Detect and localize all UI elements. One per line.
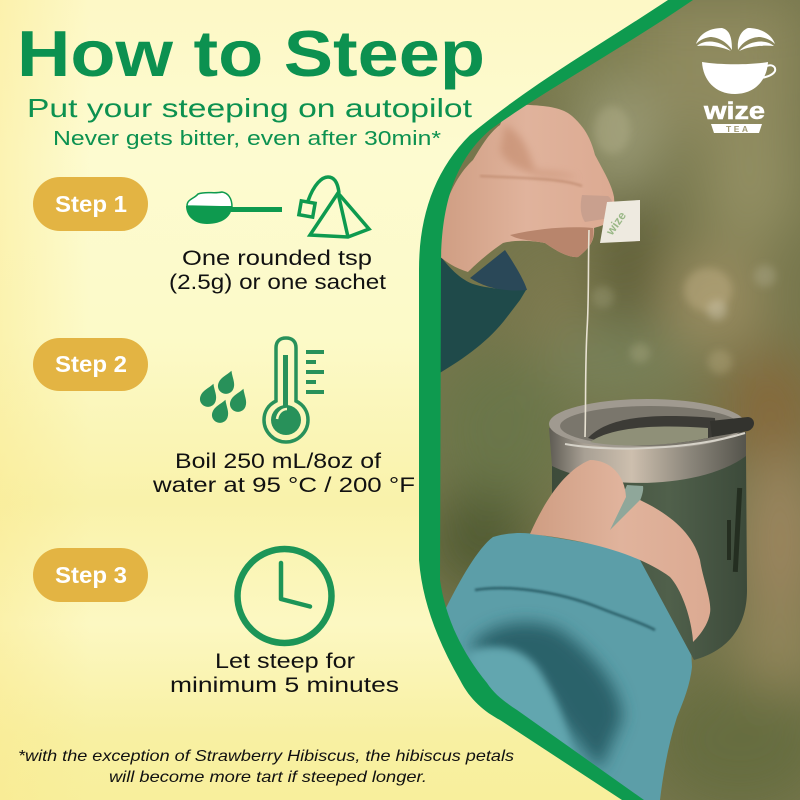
- icon: clock: [238, 549, 332, 643]
- photo: tea bag tag with brand: wize: [602, 209, 629, 239]
- logo tea band: TEA: [726, 124, 748, 134]
- step 2 badge: [33, 338, 148, 391]
- footnote: [18, 748, 514, 786]
- logo cup: [702, 62, 775, 94]
- step 1 text: (2.5g) or one sachet: [169, 271, 386, 294]
- photo background: blurred forest: [400, 0, 800, 800]
- footnote: *with the exception of Strawberry Hibiscus, the hibiscus petals: [18, 748, 514, 765]
- logo leaves: [696, 28, 775, 51]
- footnote: will become more tart if steeped longer.: [109, 769, 427, 786]
- step 3 badge: Step 3: [55, 562, 127, 588]
- photo: upper hand holding tea bag tag: [438, 105, 615, 272]
- step 3 badge: [33, 548, 148, 602]
- step 2 text: Boil 250 mL/8oz of: [175, 450, 381, 473]
- step 2 text: water at 95 °C / 200 °F: [152, 474, 415, 497]
- step 3 text: [170, 650, 399, 697]
- icon: tea sachet pyramid: [299, 177, 369, 237]
- step 1 badge: Step 1: [55, 191, 127, 217]
- photo: dark jacket cuff: [436, 250, 527, 374]
- title: How to Steep: [17, 17, 485, 90]
- logo wordmark: wize: [703, 98, 765, 125]
- icon: measuring spoon: [186, 192, 282, 224]
- step 3 text: Let steep for: [215, 650, 355, 673]
- step 1 badge: [33, 177, 148, 231]
- photo: lower arm sleeve (teal jacket): [440, 533, 692, 800]
- subtitle: Put your steeping on autopilot: [27, 93, 473, 123]
- icon: water drops: [198, 368, 251, 425]
- subtitle: [27, 93, 473, 150]
- photo: lower hand gripping mug: [530, 460, 710, 642]
- logo: wize tea: [696, 28, 775, 134]
- photo: enamel mug: [549, 399, 754, 660]
- step 3 text: minimum 5 minutes: [170, 674, 399, 697]
- step 2 text: [152, 450, 415, 497]
- photo: tea bag tag with brand: [585, 200, 640, 437]
- step 1 text: One rounded tsp: [182, 247, 372, 270]
- step 1 text: [169, 247, 386, 294]
- subtitle: Never gets bitter, even after 30min*: [53, 128, 441, 150]
- step 2 badge: Step 2: [55, 351, 127, 377]
- icon: thermometer: [264, 338, 324, 442]
